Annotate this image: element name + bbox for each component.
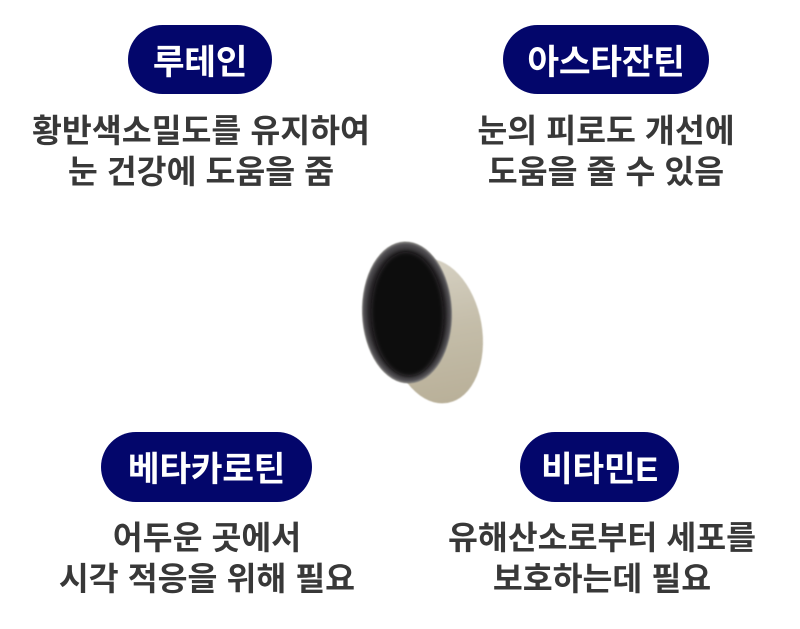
text: lutein description	[32, 113, 370, 190]
text: beta carotene description	[59, 520, 355, 597]
text: astaxanthin description: 도움을 줄 수 있음	[488, 154, 724, 190]
capsule image	[361, 240, 484, 404]
panel: lutein	[32, 25, 370, 190]
text: beta carotene description: 어두운 곳에서	[113, 520, 301, 556]
capsule body	[360, 240, 454, 385]
text: lutein description: 눈 건강에 도움을 줌	[68, 154, 334, 190]
panel: astaxanthin	[477, 25, 735, 190]
text: vitamin E description: 유해산소로부터 세포를	[448, 520, 756, 556]
panel: beta carotene	[59, 432, 355, 597]
badge: vitamin E: 비타민E	[541, 451, 658, 489]
badge: lutein: 루테인	[153, 44, 247, 82]
text: vitamin E description	[448, 520, 756, 597]
badge: astaxanthin	[503, 25, 709, 94]
panel: vitamin E	[448, 432, 756, 597]
badge: beta carotene	[101, 432, 312, 502]
badge: astaxanthin: 아스타잔틴	[527, 44, 685, 82]
text: astaxanthin description: 눈의 피로도 개선에	[477, 113, 735, 149]
text: beta carotene description: 시각 적응을 위해 필요	[59, 561, 355, 597]
badge: beta carotene: 베타카로틴	[128, 451, 285, 489]
badge: lutein	[128, 25, 272, 94]
badge: vitamin E	[520, 432, 679, 502]
text: vitamin E description: 보호하는데 필요	[493, 561, 711, 597]
text: astaxanthin description	[477, 113, 735, 190]
text: lutein description: 황반색소밀도를 유지하여	[32, 113, 370, 149]
capsule shadow	[376, 251, 494, 411]
